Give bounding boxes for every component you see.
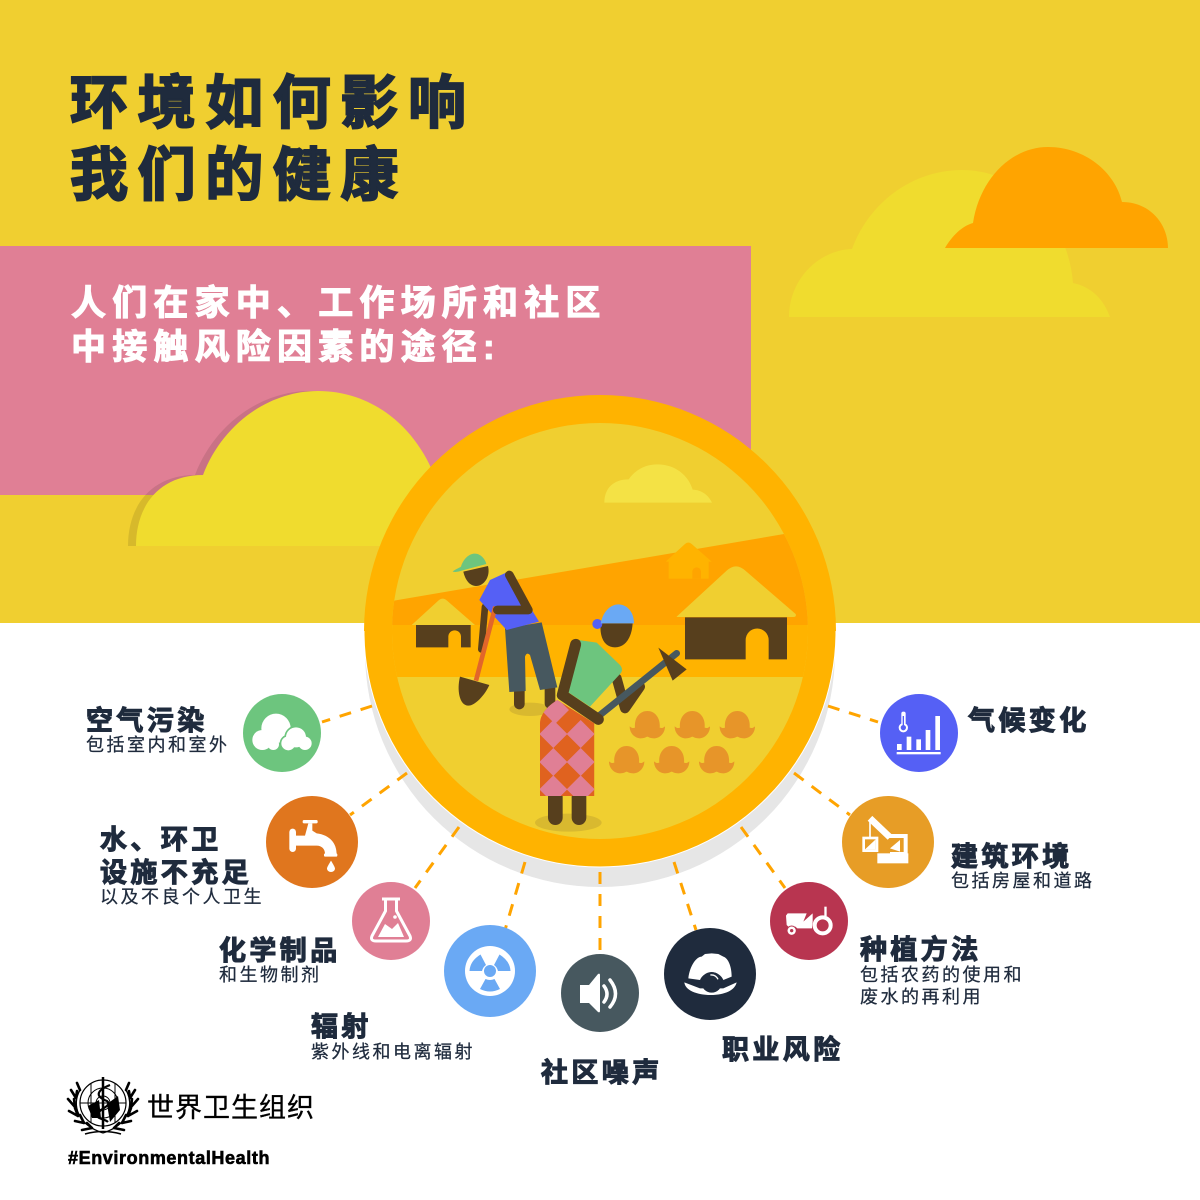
label: chemicals: 和生物制剂 (219, 965, 322, 985)
label: farming practices: 废水的再利用 (860, 987, 983, 1007)
icon: climate chart (880, 694, 958, 772)
label: water and sanitation: 水、环卫 (100, 825, 222, 855)
dashed connectors (322, 706, 878, 950)
central disc shadow (365, 417, 835, 887)
label: chemicals: 化学制品 (219, 936, 341, 966)
label: farming practices: 种植方法 (860, 934, 982, 965)
label: farming practices: 包括农药的使用和 (860, 965, 1024, 985)
title: 环境如何影响 (70, 71, 476, 136)
label: radiation: 辐射 (311, 1012, 372, 1042)
label: farming practices (860, 934, 1024, 1007)
crops (609, 711, 755, 773)
title: 我们的健康 (70, 143, 408, 208)
cloud: left with shadow (128, 391, 436, 546)
left hut (412, 599, 475, 647)
label: occupational hazards: 职业风险 (722, 1034, 844, 1065)
logo text: WHO: 世界卫生组织 (147, 1093, 315, 1123)
label: air pollution (86, 706, 230, 755)
right hut (677, 566, 796, 659)
subtitle: 人们在家中、工作场所和社区 (71, 284, 607, 323)
icon: construction crane (842, 796, 934, 888)
label: community noise: 社区噪声 (541, 1058, 663, 1088)
title (70, 71, 476, 208)
label: radiation (311, 1012, 475, 1062)
label: built environment (951, 842, 1094, 891)
icon: noise speaker (561, 954, 639, 1032)
label: air pollution: 包括室内和室外 (86, 735, 230, 755)
label: built environment: 包括房屋和道路 (951, 871, 1094, 891)
cloud: upper right orange (945, 147, 1168, 248)
small cloud (604, 464, 712, 503)
label: radiation: 紫外线和电离辐射 (311, 1042, 475, 1062)
logo: WHO emblem (68, 1077, 138, 1134)
far house (666, 542, 712, 579)
illustration scene (412, 464, 796, 832)
icon: air pollution clouds (243, 694, 321, 772)
label: built environment: 建筑环境 (951, 842, 1073, 872)
panel: pink banner (0, 246, 751, 495)
label: chemicals (219, 936, 341, 985)
label: water and sanitation: 设施不充足 (100, 858, 252, 888)
icon: occupational helmet (664, 928, 756, 1020)
label: water and sanitation (100, 825, 264, 907)
subtitle: 中接触风险因素的途径: (71, 328, 501, 367)
icon: radiation (444, 925, 536, 1017)
subtitle (71, 284, 607, 367)
label: climate change: 气候变化 (968, 706, 1090, 736)
man with shovel (453, 554, 557, 716)
icon: chemical flask (352, 882, 430, 960)
label: water and sanitation: 以及不良个人卫生 (100, 887, 264, 907)
label: air pollution: 空气污染 (86, 706, 208, 736)
central illustration disc (364, 395, 836, 867)
hashtag: #EnvironmentalHealth (68, 1148, 270, 1168)
cloud: upper right yellow (789, 170, 1110, 317)
woman with hoe (535, 604, 687, 832)
icon: tractor (770, 882, 848, 960)
icon: water tap (266, 796, 358, 888)
